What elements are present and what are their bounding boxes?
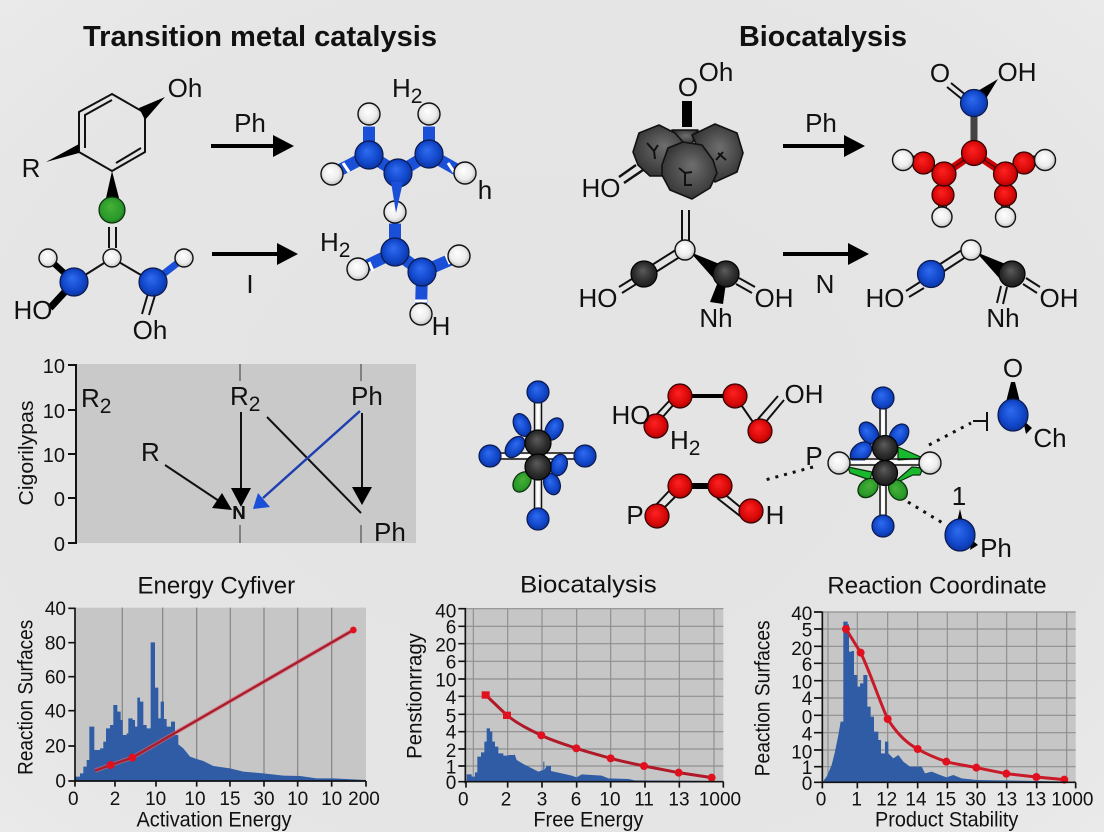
molecule: blue and white product: H [432, 311, 450, 341]
molecule: ring substrate with green metal centre: Oh [168, 73, 202, 103]
chart: reaction coordinate: 30 [965, 790, 986, 811]
arrow: Ph reagent, transition metal [211, 108, 294, 157]
chart: biocatalysis: 0 [458, 790, 469, 811]
molecule: ring substrate with green metal centre: Oh [133, 315, 167, 345]
chart: reaction coordinate: 10 [791, 742, 812, 763]
chart: reaction coordinate: 13 [996, 790, 1017, 811]
chart: reaction coordinate: 20 [791, 639, 812, 660]
chart: energy cyfiver: 15 [219, 789, 241, 810]
chart: reaction coordinate: 1 [802, 758, 812, 779]
chart: biocatalysis: 2 [446, 741, 456, 762]
chart: energy cyfiver: 2 [110, 789, 120, 810]
chart: reaction coordinate: 1000 [1051, 790, 1093, 811]
chart: biocatalysis: 40 [435, 601, 456, 622]
chart: biocatalysis: Biocatalysis [520, 571, 657, 598]
chart: biocatalysis: 20 [435, 636, 456, 657]
chart: reaction coordinate: 4 [802, 725, 812, 746]
chart: biocatalysis [404, 571, 741, 832]
chart: energy cyfiver: 40 [45, 701, 66, 722]
chart: energy cyfiver: 40 [45, 599, 66, 620]
chart: energy cyfiver: 10 [184, 789, 206, 810]
chart: energy cyfiver: 200 [348, 789, 380, 810]
chart: reaction coordinate: 12 [876, 790, 897, 811]
arrow: I reagent, transition metal: I [246, 269, 254, 299]
molecule: lower biocatalysis product [866, 240, 1078, 333]
molecule: lower red chain: P [626, 500, 644, 530]
panel: mechanism diagram: N [233, 503, 246, 523]
molecule: upper red chain: HO [612, 400, 650, 430]
chart: biocatalysis: 0 [446, 773, 456, 794]
chart: reaction coordinate: 0 [816, 790, 826, 811]
chart: reaction coordinate: Product Stability [875, 809, 1019, 832]
chart: biocatalysis: 4 [446, 722, 456, 743]
chart: reaction coordinate: Peaction Surfaces [751, 620, 774, 776]
panel: mechanism diagram: 10 [43, 356, 65, 378]
chart: biocatalysis: 10 [599, 790, 621, 811]
chart: biocatalysis: 13 [668, 790, 690, 811]
molecule: upper red chain: H [670, 425, 689, 455]
panel: mechanism diagram: 2 [100, 395, 111, 418]
chart: energy cyfiver: 0 [55, 772, 66, 793]
molecule: upper red chain [612, 379, 824, 460]
chart: energy cyfiver: 10 [287, 789, 308, 810]
chart: biocatalysis: 1 [446, 757, 456, 778]
title: biocatalysis: Biocatalysis [739, 21, 907, 53]
chart: biocatalysis: 6 [446, 618, 456, 639]
panel: mechanism diagram: Ph [374, 517, 406, 547]
chart: reaction coordinate: 0 [802, 708, 812, 729]
chart: reaction coordinate: 14 [905, 790, 927, 811]
chart: reaction coordinate: 10 [791, 672, 812, 693]
chart: energy cyfiver: 60 [45, 667, 66, 688]
chart: biocatalysis: 1000 [699, 790, 741, 811]
histogram [75, 642, 366, 781]
chart: energy cyfiver: 10 [321, 789, 342, 810]
molecule: octahedral complex, green lobes with ligands [765, 353, 1067, 563]
chart: biocatalysis: 10 [435, 671, 456, 692]
chart: biocatalysis: 11 [634, 790, 654, 811]
molecule: lower biocatalysis substrate [578, 210, 794, 333]
molecule: grey enzyme cluster [582, 57, 743, 203]
chart: reaction coordinate: 5 [802, 621, 812, 642]
arrow: Ph reagent, transition metal: Ph [234, 108, 266, 138]
chart: reaction coordinate: 40 [791, 604, 812, 625]
trend line [482, 691, 716, 782]
chart: reaction coordinate: 1 [851, 790, 862, 811]
chart: biocatalysis: 4 [446, 688, 456, 709]
molecule: blue and white product: h [478, 175, 492, 205]
chart: reaction coordinate: 15 [935, 790, 956, 811]
panel: mechanism diagram: N [232, 503, 245, 523]
arrow: Ph reagent, biocatalysis [783, 108, 865, 157]
chart: biocatalysis: 5 [446, 706, 456, 727]
arrow: N reagent, biocatalysis [783, 243, 869, 299]
molecule: upper red chain: 2 [689, 437, 700, 460]
molecule: octahedral complex, green lobes with ligands: Ch [1033, 423, 1067, 453]
chart: reaction coordinate [751, 572, 1093, 832]
histogram [823, 622, 1076, 782]
molecule: octahedral complex, blue lobes [479, 381, 596, 530]
chart: biocatalysis: 3 [537, 790, 547, 811]
molecule: lower red chain: H [766, 500, 784, 530]
molecule: grey enzyme cluster: O [678, 72, 698, 102]
chart: biocatalysis: Penstionrragy [404, 633, 427, 759]
chart: reaction coordinate: Reaction Coordinate [827, 572, 1047, 599]
molecule: blue and white product: 2 [339, 239, 350, 262]
panel: mechanism diagram: 10 [43, 445, 65, 467]
trend line [842, 625, 1068, 784]
molecule: octahedral complex, green lobes with ligands: 1 [952, 481, 966, 511]
molecule: grey enzyme cluster: HO [582, 173, 620, 203]
chart: energy cyfiver: 0 [68, 789, 79, 810]
panel: mechanism diagram: 0 [54, 489, 65, 511]
molecule: lower biocatalysis substrate: OH [754, 283, 794, 313]
molecule: lower biocatalysis product: OH [1040, 283, 1078, 313]
molecule: octahedral complex, green lobes with ligands: O [1003, 353, 1023, 383]
panel: mechanism diagram: 0 [54, 534, 65, 556]
chart: energy cyfiver: 20 [45, 737, 66, 758]
molecule: upper red chain: OH [784, 379, 824, 409]
arrow: Ph reagent, biocatalysis: Ph [805, 108, 837, 138]
chart: energy cyfiver: Activation Energy [136, 809, 292, 832]
molecule: red product: OH [998, 57, 1036, 87]
chart: energy cyfiver [15, 572, 380, 832]
panel: mechanism diagram [16, 356, 416, 556]
chart: reaction coordinate: 4 [802, 689, 812, 710]
arrow: I reagent, transition metal [212, 243, 298, 299]
panel: mechanism diagram: R [81, 383, 100, 413]
molecule: blue and white product: H [320, 227, 339, 257]
molecule: grey enzyme cluster: Oh [699, 57, 733, 87]
arrow: N reagent, biocatalysis: N [816, 269, 834, 299]
molecule: lower biocatalysis substrate: Nh [699, 303, 733, 333]
chart: biocatalysis: Free Energy [533, 809, 644, 832]
molecule: ring substrate with green metal centre: R [22, 153, 40, 183]
chart: reaction coordinate: 13 [1025, 790, 1046, 811]
molecule: red product [892, 57, 1056, 227]
molecule: lower biocatalysis product: HO [866, 283, 904, 313]
panel: mechanism diagram: Ph [351, 381, 383, 411]
molecule: blue and white product: H [392, 73, 411, 103]
histogram [467, 728, 723, 782]
chart: energy cyfiver: 10 [145, 789, 166, 810]
panel: mechanism diagram: 10 [43, 401, 65, 423]
molecule: ring substrate with green metal centre [14, 73, 202, 345]
molecule: octahedral complex, green lobes with ligands: Ph [980, 533, 1012, 563]
chart: energy cyfiver: Reaction Surfaces [15, 620, 38, 775]
chart: energy cyfiver: 80 [45, 633, 66, 654]
molecule: lower red chain [626, 474, 784, 530]
chart: energy cyfiver: Energy Cyfiver [137, 572, 295, 599]
molecule: lower biocatalysis product: Nh [986, 303, 1020, 333]
chart: biocatalysis: 6 [571, 790, 581, 811]
panel: mechanism diagram: R [141, 437, 160, 467]
panel: mechanism diagram: R [230, 381, 249, 411]
chart: reaction coordinate: 0 [802, 774, 812, 795]
molecule: lower biocatalysis substrate: HO [578, 283, 618, 313]
molecule: ring substrate with green metal centre: HO [14, 295, 52, 325]
panel: mechanism diagram: Cigorilypas [16, 400, 38, 506]
panel: mechanism diagram: 2 [249, 393, 260, 416]
trend line [95, 627, 357, 771]
chart: energy cyfiver: 30 [253, 789, 275, 810]
molecule: blue and white product: 2 [411, 85, 422, 108]
molecule: blue and white product [320, 73, 492, 341]
chart: reaction coordinate: 6 [802, 655, 812, 676]
chart: biocatalysis: 6 [446, 652, 456, 673]
molecule: red product: O [930, 58, 950, 88]
molecule: octahedral complex, green lobes with ligands: P [805, 441, 823, 471]
chart: biocatalysis: 2 [501, 790, 511, 811]
title: transition metal catalysis: Transition metal catalysis [83, 21, 437, 53]
